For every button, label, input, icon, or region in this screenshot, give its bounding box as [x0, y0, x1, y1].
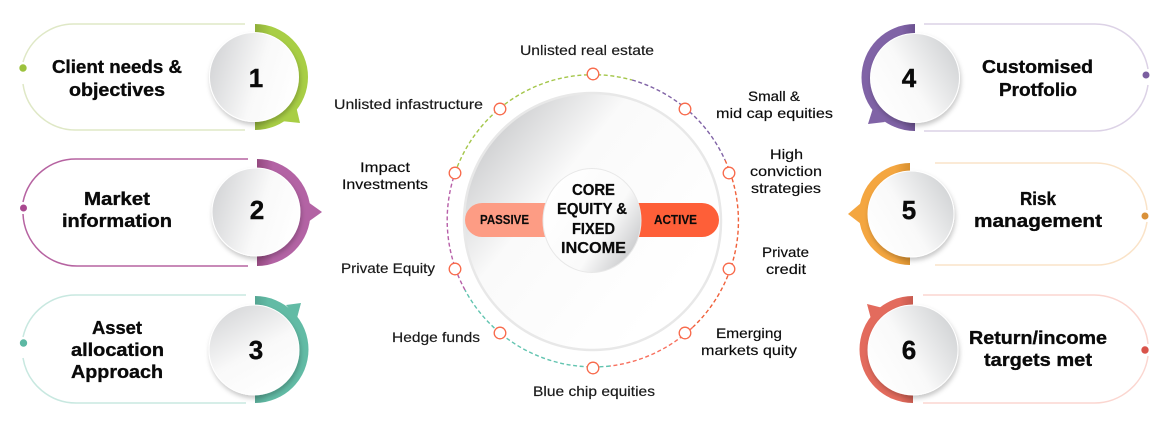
large disc — [464, 93, 721, 350]
panel: step 1 client needs — [19, 24, 308, 130]
label: high conviction strategies: strategies — [751, 180, 821, 196]
heading: risk management: Risk — [1020, 189, 1057, 209]
card outline 4 — [924, 24, 1148, 131]
label: emerging markets quity — [701, 325, 797, 358]
number badge 5: 5 — [902, 195, 916, 225]
label: impact investments: Impact — [360, 159, 410, 175]
panel: step 2 market information — [20, 159, 322, 266]
heading: client needs — [52, 57, 182, 100]
heading: asset allocation approach: Asset — [92, 318, 142, 338]
heading: risk management: management — [974, 211, 1102, 231]
label: private equity: Private Equity — [341, 260, 435, 276]
number badge 2 — [212, 159, 322, 266]
panel: step 5 risk management — [848, 163, 1148, 265]
connector dot 5 — [1142, 212, 1148, 220]
core circle: INCOME — [561, 240, 626, 257]
number badge 1: 1 — [249, 63, 263, 93]
label: impact investments — [342, 159, 428, 192]
label: hedge funds: Hedge funds — [392, 329, 480, 345]
core circle: FIXED — [572, 221, 615, 238]
number badge 3: 3 — [249, 335, 263, 365]
heading: market information: Market — [84, 189, 150, 209]
label: private credit: Private — [762, 244, 809, 260]
panel: step 4 customised portfolio — [861, 24, 1150, 131]
label: private credit: credit — [766, 261, 806, 277]
label: impact investments: Investments — [342, 176, 428, 192]
card outline 3 — [23, 295, 246, 403]
heading: return income targets met: Return/income — [969, 328, 1107, 348]
card outline 1 — [23, 24, 245, 130]
heading: asset allocation approach: Approach — [71, 362, 163, 382]
core circle: EQUITY & — [557, 201, 627, 218]
number badge 3 — [209, 296, 308, 403]
heading: return income targets met — [969, 328, 1107, 370]
heading: customised protfolio: Customised — [982, 57, 1093, 77]
passive pill — [465, 203, 560, 237]
label: unlisted infastructure: Unlisted infastructure — [334, 96, 483, 112]
card outline 5 — [935, 163, 1147, 265]
active pill — [625, 203, 719, 237]
number badge 6 — [860, 296, 958, 403]
card outline 2 — [23, 159, 248, 266]
label: high conviction strategies: conviction — [750, 163, 822, 179]
label: blue chip equities: Blue chip equities — [533, 383, 655, 399]
card outline 6 — [923, 295, 1148, 403]
connector dot 1 — [19, 64, 27, 72]
heading: customised protfolio: Protfolio — [999, 80, 1077, 100]
connector dot 3 — [20, 339, 27, 347]
central diagram — [447, 68, 738, 374]
label: high conviction strategies — [750, 146, 822, 196]
panel: step 3 asset allocation — [20, 295, 309, 403]
number badge 2: 2 — [250, 195, 264, 225]
label: small and mid cap equities: Small & — [748, 88, 801, 104]
core circle: CORE — [572, 182, 615, 199]
number badge 1 — [210, 24, 308, 130]
label: small and mid cap equities — [716, 88, 833, 121]
heading: asset allocation approach — [71, 318, 164, 382]
connector dot 6 — [1141, 346, 1149, 354]
heading: client needs: objectives — [69, 80, 165, 100]
panel: step 6 return targets — [860, 295, 1149, 403]
label: small and mid cap equities: mid cap equities — [716, 105, 833, 121]
heading: risk management — [974, 189, 1102, 231]
heading: market information — [62, 189, 172, 231]
label: unlisted real estate: Unlisted real estate — [520, 42, 654, 58]
heading: market information: information — [62, 211, 172, 231]
label: emerging markets quity: Emerging — [716, 325, 782, 341]
orbit nodes — [449, 68, 735, 374]
heading: customised protfolio — [982, 57, 1093, 100]
label: high conviction strategies: High — [770, 146, 803, 162]
heading: client needs: Client needs & — [52, 57, 182, 77]
passive pill: PASSIVE — [480, 213, 529, 227]
number badge 4 — [861, 24, 960, 131]
number badge 4: 4 — [902, 63, 917, 93]
heading: return income targets met: targets met — [984, 350, 1092, 370]
label: private credit — [762, 244, 809, 277]
core circle — [543, 168, 641, 272]
dashed orbit — [447, 75, 738, 367]
number badge 6: 6 — [902, 335, 916, 365]
active pill: ACTIVE — [654, 213, 697, 227]
heading: asset allocation approach: allocation — [71, 340, 164, 360]
number badge 5 — [848, 163, 954, 265]
connector dot 2 — [20, 204, 27, 212]
connector dot 4 — [1142, 72, 1150, 78]
label: emerging markets quity: markets quity — [701, 342, 797, 358]
